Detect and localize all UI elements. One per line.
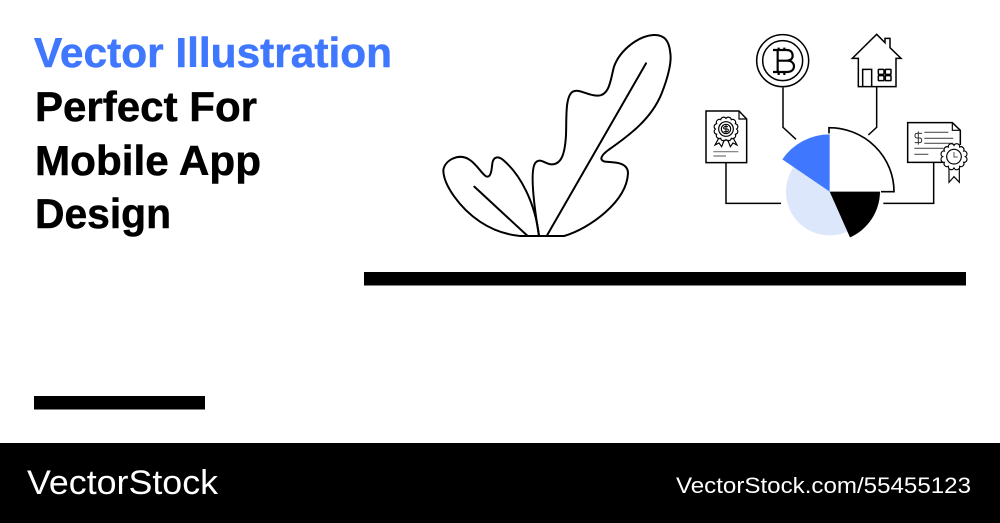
footer logo text: VectorStock — [27, 464, 219, 502]
light blue slice — [786, 167, 847, 235]
illustration: plant leaves — [443, 35, 671, 236]
icon: house — [852, 34, 901, 87]
blue slice — [782, 134, 830, 192]
connector: contract to pie — [883, 162, 934, 203]
small leaf outline — [443, 157, 564, 236]
connector: bitcoin to pie — [783, 87, 796, 139]
large leaf vein — [547, 63, 646, 236]
connector: house to pie — [868, 87, 877, 135]
icon: contract with clock seal — [908, 123, 967, 182]
title line: Mobile App: Mobile App — [35, 137, 261, 184]
footer band — [0, 443, 1000, 523]
connector: certificate to pie — [726, 163, 781, 203]
short black bar — [34, 396, 205, 410]
title line: Vector Illustration: Vector Illustration — [34, 29, 392, 76]
footer image url: VectorStock.com/55455123 — [676, 473, 971, 498]
long black bar — [364, 272, 966, 286]
pie chart — [782, 128, 894, 237]
small leaf vein — [474, 187, 528, 236]
icon: award document — [706, 111, 747, 163]
title — [34, 29, 392, 237]
title line: Perfect For: Perfect For — [35, 83, 257, 130]
icon: bitcoin coin — [757, 35, 809, 87]
illustration: finance pie chart with icons — [706, 34, 967, 237]
title line: Design: Design — [35, 190, 171, 237]
outlined white slice — [829, 128, 894, 192]
black slice — [830, 192, 880, 237]
large leaf outline — [533, 35, 671, 236]
